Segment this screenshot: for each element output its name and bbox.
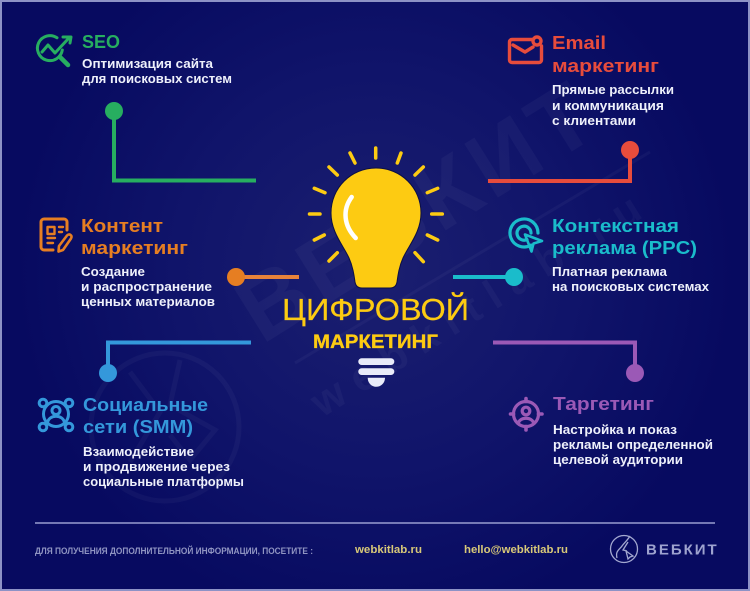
heading: SMM: сети (SMM) <box>83 416 193 437</box>
watermark: webkitlab.ru <box>301 184 649 426</box>
heading: PPC <box>552 215 697 258</box>
text block: Email description: Прямые рассылки <box>552 83 674 97</box>
icon: bulb base <box>358 358 394 387</box>
text block: PPC description: на поисковых системах <box>552 280 709 294</box>
panel: SMM <box>39 342 251 489</box>
text block: Content description: Создание <box>81 265 145 279</box>
footer text: contact prompt: ДЛЯ ПОЛУЧЕНИЯ ДОПОЛНИТЕЛЬНОЙ ИНФОРМАЦИИ, ПОСЕТИТЕ : <box>35 545 313 556</box>
text block: SMM description <box>83 445 244 489</box>
title: ЦИФРОВОЙ <box>282 291 469 327</box>
icon: target click cursor <box>510 219 542 252</box>
connector: PPC <box>453 268 523 286</box>
text block: Targeting description: Настройка и показ <box>553 423 677 437</box>
bulb glass <box>331 168 421 288</box>
heading: Email: Email <box>552 32 606 53</box>
icon: target person <box>510 398 542 430</box>
text block: SMM description: Взаимодействие <box>83 445 194 459</box>
heading: Email: маркетинг <box>552 55 659 76</box>
heading: PPC: Контекстная <box>552 215 679 236</box>
text block: Targeting description <box>553 423 713 467</box>
heading: PPC: реклама (PPC) <box>552 237 697 258</box>
watermark: ВЕБКИТ <box>219 63 612 362</box>
text block: PPC description <box>552 265 709 294</box>
connector: Email <box>488 141 639 181</box>
heading: Email <box>552 32 659 76</box>
icon: light bulb <box>310 148 442 288</box>
connector: SMM <box>99 342 251 382</box>
text block: SMM description: социальные платформы <box>83 475 244 489</box>
panel: Email <box>488 32 674 181</box>
panel: Content <box>41 215 299 309</box>
connector: Content <box>227 268 299 286</box>
text block: Content description: и распространение <box>81 280 212 294</box>
heading: SEO: SEO <box>82 31 120 52</box>
title: МАРКЕТИНГ <box>313 332 438 353</box>
heading: Content: маркетинг <box>81 237 188 258</box>
heading: Content <box>81 215 188 258</box>
footer link: email: hello@webkitlab.ru <box>464 544 568 556</box>
icon: social network <box>39 399 73 431</box>
text block: Content description: ценных материалов <box>81 295 215 309</box>
icon: SEO magnifier with chart <box>37 36 71 65</box>
watermark <box>91 63 650 501</box>
logo <box>610 536 719 562</box>
footer <box>35 522 719 562</box>
text block: Targeting description: целевой аудитории <box>553 453 683 467</box>
icon: document and pencil <box>41 219 72 252</box>
heading: SMM: Социальные <box>83 394 208 415</box>
text block: Content description <box>81 265 215 309</box>
text block: Email description: с клиентами <box>552 114 636 128</box>
text block: Email description <box>552 83 674 128</box>
bulb highlight <box>346 197 356 238</box>
footer link: website: webkitlab.ru <box>354 544 422 556</box>
logo: ВЕБКИТ <box>646 542 719 558</box>
connector: SEO <box>105 102 256 180</box>
icon: envelope <box>510 37 542 62</box>
text block: Email description: и коммуникация <box>552 99 664 113</box>
text block: SMM description: и продвижение через <box>83 460 230 474</box>
text block: SEO description: для поисковых систем <box>82 72 232 86</box>
panel: Targeting <box>493 342 713 467</box>
text block: Targeting description: рекламы определенной <box>553 438 713 452</box>
title <box>282 291 469 353</box>
text block: SEO description: Оптимизация сайта <box>82 57 214 71</box>
text block: PPC description: Платная реклама <box>552 265 668 279</box>
connector: Targeting <box>493 342 644 382</box>
panel: SEO <box>37 31 256 180</box>
heading: Content: Контент <box>81 215 163 236</box>
heading: Targeting: Таргетинг <box>553 393 654 414</box>
heading: SMM <box>83 394 208 437</box>
panel: PPC <box>453 215 709 294</box>
text block: SEO description <box>82 57 232 86</box>
bulb rays <box>310 148 442 262</box>
